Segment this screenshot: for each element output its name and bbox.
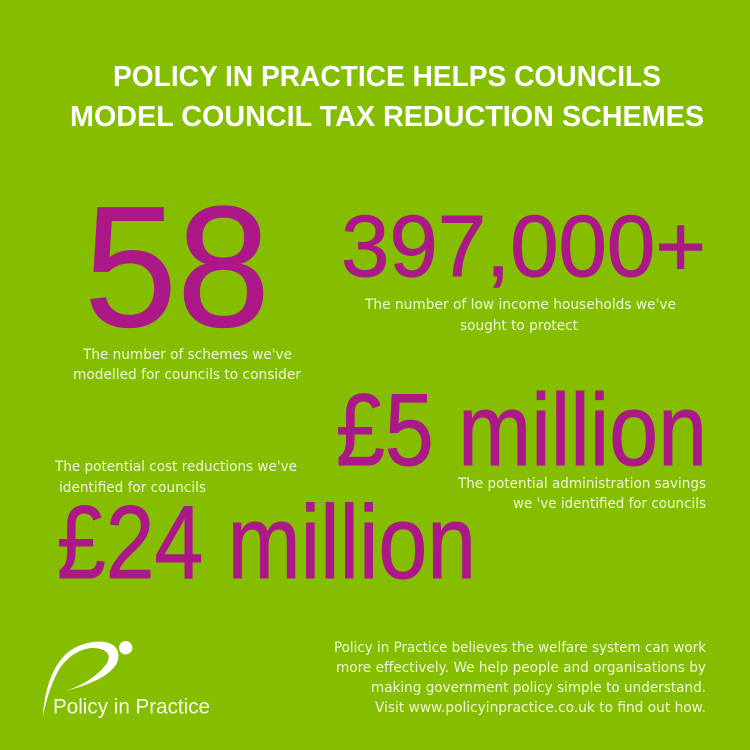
- title: [70, 61, 704, 133]
- stat: 397,000+ households: sought to protect: [460, 318, 578, 334]
- logo: Policy in Practice: [43, 641, 210, 718]
- stat: 58 schemes: modelled for councils to consider: [73, 367, 301, 383]
- text block: about Policy in Practice: more effectively. We help people and organisations by: [336, 660, 706, 676]
- stat: 58 schemes: The number of schemes we've: [82, 347, 292, 363]
- stat: £5 million: The potential administration savings: [457, 476, 706, 492]
- stat: £24 million: £24 million: [57, 485, 476, 601]
- text block: about Policy in Practice: making government policy simple to understand.: [371, 680, 706, 696]
- stat: 397,000+ households: The number of low income households we've: [364, 297, 676, 313]
- text block: about Policy in Practice: [334, 640, 707, 716]
- title: MODEL COUNCIL TAX REDUCTION SCHEMES: [70, 101, 704, 133]
- stat: 58 schemes: 58: [84, 171, 270, 363]
- stat: £24 million: identified for councils: [59, 480, 206, 496]
- text block: about Policy in Practice: Policy in Practice believes the welfare system can work: [334, 640, 707, 656]
- text block: about Policy in Practice: Visit www.policyinpractice.co.uk to find out how.: [375, 700, 706, 716]
- stat: 397,000+ households: 397,000+: [341, 198, 706, 295]
- logo: Policy in Practice: Policy in Practice: [53, 696, 210, 718]
- stat: £24 million: The potential cost reductions we've: [54, 459, 297, 475]
- title: POLICY IN PRACTICE HELPS COUNCILS: [113, 61, 661, 93]
- icon: swoosh and dot: [43, 641, 132, 717]
- stat: £5 million: we 've identified for councils: [513, 496, 706, 512]
